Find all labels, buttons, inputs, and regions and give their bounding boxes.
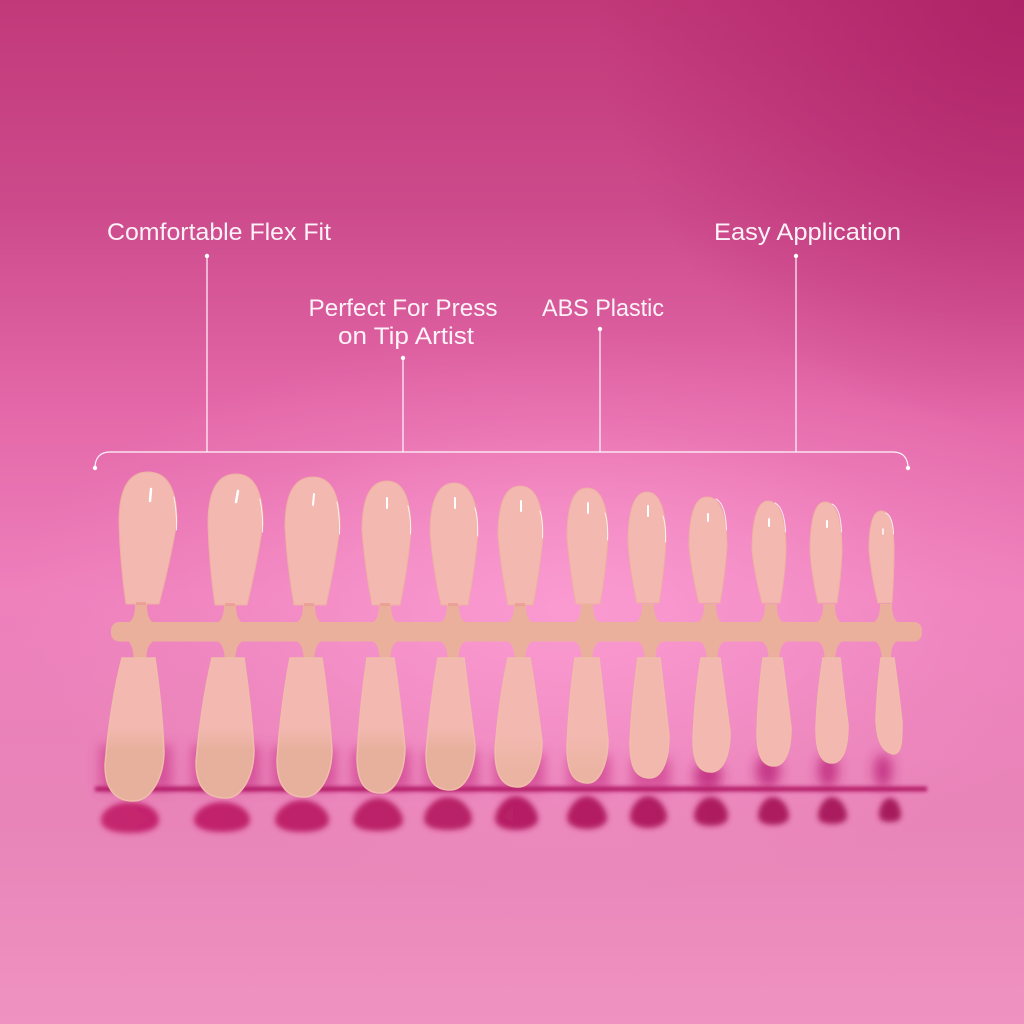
label: Perfect For Press on Tip Artist: on Tip Artist — [338, 323, 474, 350]
nail 6 — [498, 486, 543, 605]
nail tip sheet — [105, 472, 922, 801]
nail 5 — [430, 483, 478, 605]
soft upper shadows — [100, 745, 892, 791]
nail 3 — [277, 658, 332, 797]
plastic runner with stems — [111, 604, 922, 660]
bar shadow — [95, 786, 927, 792]
label: Perfect For Press on Tip Artist: Perfect For Press — [308, 295, 498, 322]
nail 11 — [816, 658, 848, 763]
nail 4 — [362, 481, 411, 605]
nail 6 — [495, 658, 542, 787]
nail 9 — [693, 658, 730, 772]
nail 11 — [810, 502, 842, 603]
nail 1 — [105, 658, 164, 801]
nail 12 — [869, 511, 894, 603]
label: Comfortable Flex Fit: Comfortable Flex Fit — [107, 219, 331, 246]
nail 2 — [208, 474, 263, 605]
bracket with leader lines — [93, 254, 910, 470]
nail 8 — [628, 492, 666, 603]
lower row of nails — [105, 658, 902, 801]
nail 7 — [567, 658, 608, 783]
nail 8 — [630, 658, 669, 778]
blob shadows — [101, 796, 901, 833]
cast shadows — [95, 745, 927, 833]
nail 2 — [196, 658, 254, 798]
upper row of nails — [119, 472, 894, 605]
nail 7 — [567, 488, 608, 604]
nail 12 — [876, 658, 902, 754]
nail 3 — [285, 477, 340, 605]
label: ABS Plastic: ABS Plastic — [542, 295, 664, 322]
nail 9 — [689, 497, 727, 603]
gloss highlights — [150, 489, 894, 542]
nail 10 — [752, 501, 786, 603]
nail 1 — [119, 472, 177, 604]
nail 10 — [757, 658, 791, 766]
nail 5 — [426, 658, 475, 790]
label: Perfect For Press on Tip Artist — [308, 295, 498, 350]
nail 4 — [357, 658, 405, 793]
label: Easy Application: Easy Application — [714, 219, 901, 246]
nail base joints — [136, 602, 525, 606]
